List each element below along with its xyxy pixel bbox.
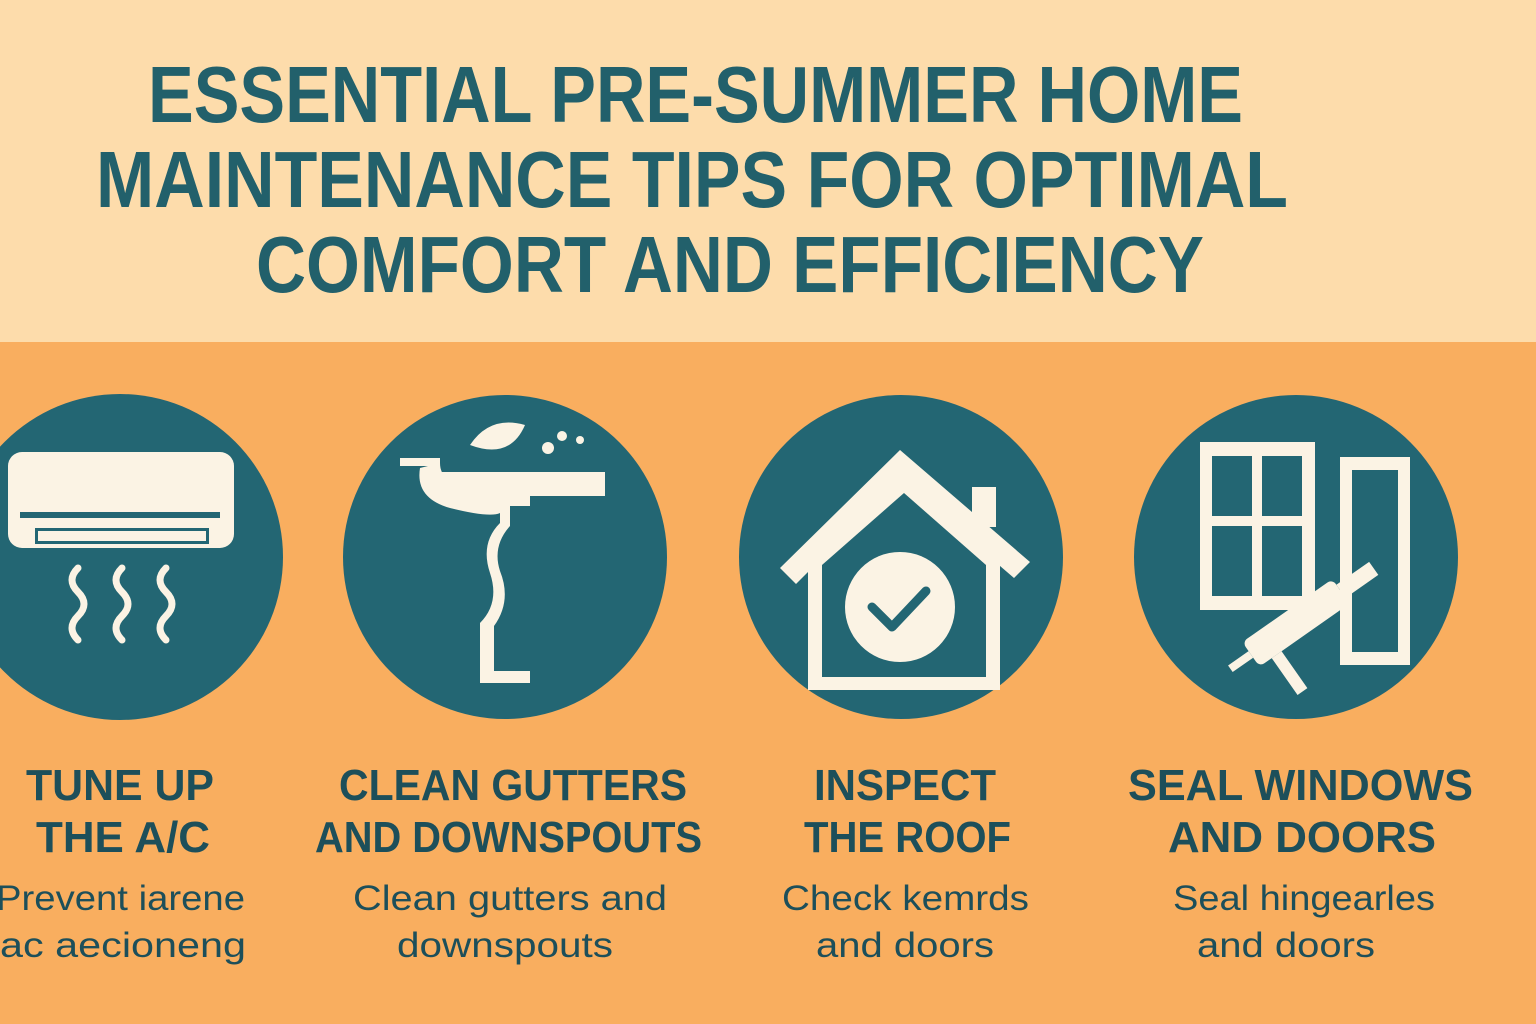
body text: Prevent iarene (0, 879, 245, 918)
title: ESSENTIAL PRE-SUMMER HOME (148, 50, 1243, 139)
icon: air conditioner (0, 394, 283, 720)
heading: AND DOWNSPOUTS (315, 813, 702, 862)
body text: downspouts (397, 926, 613, 965)
heading: THE ROOF (804, 813, 1011, 862)
title: MAINTENANCE TIPS FOR OPTIMAL (96, 135, 1288, 224)
title (96, 50, 1288, 309)
body text: and doors (1197, 926, 1375, 965)
body text (0, 879, 246, 965)
body text: Check kemrds (782, 879, 1029, 918)
title: COMFORT AND EFFICIENCY (256, 220, 1204, 309)
body text: Seal hingearles (1173, 879, 1435, 918)
panel: clean gutters (315, 395, 702, 965)
heading (804, 761, 1011, 862)
heading: THE A/C (36, 813, 210, 862)
heading (26, 761, 214, 862)
icon: gutter (343, 395, 667, 719)
body text: ac aecioneng (0, 926, 246, 965)
heading (1128, 761, 1473, 862)
panel: seal windows (1128, 395, 1473, 965)
body text (1173, 879, 1435, 965)
body text (782, 879, 1029, 965)
body text: and doors (816, 926, 994, 965)
body text (353, 879, 667, 965)
icon: window and caulk gun (1134, 395, 1458, 719)
heading: INSPECT (814, 761, 996, 810)
heading: CLEAN GUTTERS (339, 761, 687, 810)
heading: AND DOORS (1168, 813, 1436, 862)
panel: inspect roof (739, 395, 1063, 965)
icon: house (739, 395, 1063, 719)
body text: Clean gutters and (353, 879, 667, 918)
heading (315, 761, 702, 862)
panel: tune up A/C (0, 394, 283, 965)
heading: TUNE UP (26, 761, 214, 810)
heading: SEAL WINDOWS (1128, 761, 1473, 810)
